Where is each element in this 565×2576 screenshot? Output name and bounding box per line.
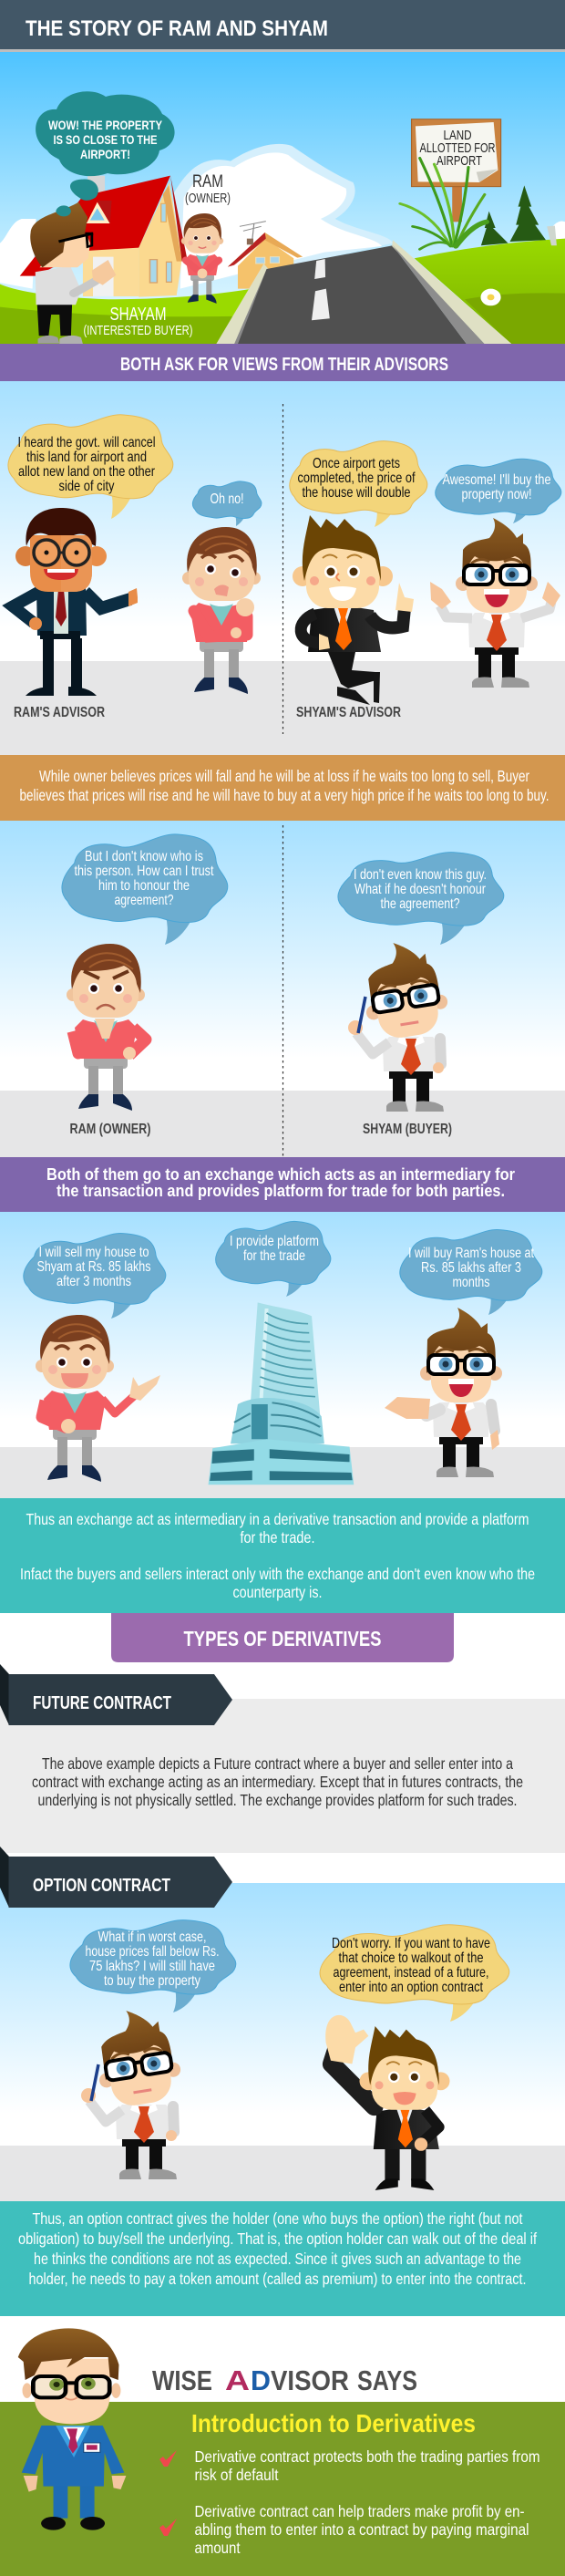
bullet 2 bbox=[195, 2502, 529, 2557]
tab: option contract: OPTION CONTRACT bbox=[33, 1875, 170, 1896]
bubble: Ram doubt: him to honour the bbox=[98, 878, 190, 894]
tab: future contract: FUTURE CONTRACT bbox=[33, 1692, 171, 1713]
bubble: Shyam buy: months bbox=[452, 1275, 490, 1290]
icon: red check 1 bbox=[159, 2450, 177, 2467]
thought text bbox=[48, 118, 163, 161]
sign text: LAND bbox=[443, 128, 472, 143]
label: Shyam's advisor: SHYAM'S ADVISOR bbox=[296, 705, 401, 720]
bubble: Ram sell: I will sell my house to bbox=[38, 1245, 149, 1260]
sign text: ALLOTTED FOR bbox=[419, 140, 496, 156]
bubble: exchange: I provide platform bbox=[230, 1234, 319, 1249]
bubble: don't worry: that choice to walkout of the bbox=[339, 1950, 484, 1966]
bubble: Ram doubt: agreement? bbox=[115, 893, 174, 908]
bubble: Ram's advisor: side of city bbox=[58, 479, 115, 494]
label: Ram's advisor: RAM'S ADVISOR bbox=[14, 705, 105, 720]
bubble: exchange bbox=[216, 1221, 331, 1297]
banner: both ask advisors bbox=[0, 344, 565, 381]
bubble: Shyam buy: I will buy Ram's house at bbox=[408, 1246, 534, 1261]
bubble: Shyam buy: Rs. 85 lakhs after 3 bbox=[421, 1260, 521, 1276]
character: Shyam with pen bbox=[81, 2003, 185, 2179]
small house bbox=[228, 222, 303, 289]
label: Ram owner: (OWNER) bbox=[185, 191, 231, 206]
bubble: Oh no: Oh no! bbox=[210, 491, 244, 507]
bullet 1 bbox=[195, 2447, 539, 2484]
banner: owner and buyer beliefs bbox=[0, 755, 565, 821]
bubble: don't worry bbox=[320, 1925, 509, 2022]
bubble: Shyam doubt: What if he doesn't honour bbox=[354, 882, 487, 897]
thought text: WOW! THE PROPERTY bbox=[48, 118, 163, 132]
banner: exchange as intermediary bbox=[0, 1498, 565, 1613]
character: Ram offering bbox=[36, 1315, 160, 1482]
label: Ram owner: RAM (OWNER) bbox=[69, 1122, 151, 1137]
icon: red check 2 bbox=[159, 2519, 177, 2536]
bubble: Shyam doubt bbox=[338, 853, 504, 945]
right hills bbox=[415, 239, 565, 344]
sign text: AIRPORT bbox=[437, 153, 482, 169]
bubble: Shyam's advisor: Once airport gets bbox=[313, 456, 400, 471]
logo heading: WISE bbox=[152, 2364, 212, 2396]
airport sign bbox=[412, 119, 501, 222]
character: Shyam with pen bbox=[348, 936, 452, 1112]
bubble: Shyam's advisor bbox=[290, 441, 427, 527]
panel: option contract scene bbox=[0, 1847, 565, 2201]
left hill bbox=[0, 284, 252, 344]
logo heading: D bbox=[251, 2364, 271, 2396]
banner: go to an exchange bbox=[0, 1157, 565, 1212]
bubble: don't worry: Don't worry. If you want to have bbox=[332, 1936, 490, 1951]
future contract text bbox=[32, 1754, 523, 1809]
logo heading bbox=[152, 2364, 417, 2396]
logo heading: VISOR bbox=[271, 2364, 349, 2396]
bubble: worst case bbox=[70, 1920, 236, 2012]
grass bbox=[400, 158, 487, 249]
bubble: Ram doubt: this person. How can I trust bbox=[75, 864, 214, 879]
character: wise advisor bbox=[18, 2328, 126, 2530]
bubble: don't worry: agreement, instead of a future, bbox=[334, 1965, 488, 1981]
big house bbox=[20, 176, 187, 297]
panel: wise advisor says bbox=[0, 2328, 565, 2576]
bubble: Shyam buy bbox=[400, 1230, 542, 1315]
panel: trust problem bbox=[0, 821, 565, 1157]
label: Shayam interested buyer: SHAYAM bbox=[109, 305, 166, 325]
thought text: IS SO CLOSE TO THE bbox=[53, 132, 157, 147]
panel: advisors' views bbox=[0, 381, 565, 755]
bubble: Shyam bbox=[436, 459, 561, 523]
label: Ram owner bbox=[185, 172, 231, 206]
banner: both ask advisors: BOTH ASK FOR VIEWS FROM THEIR ADVISORS bbox=[120, 355, 448, 375]
character: Shyam excited bbox=[430, 518, 560, 688]
bubble: Ram sell: after 3 months bbox=[56, 1274, 131, 1289]
label: Shayam interested buyer bbox=[84, 305, 193, 338]
bubble: Ram doubt bbox=[62, 834, 228, 945]
bubble: Ram's advisor bbox=[8, 415, 173, 519]
flower bbox=[480, 289, 501, 305]
bullet 2: amount bbox=[195, 2539, 241, 2557]
banner: exchange as intermediary: counterparty is. bbox=[233, 1583, 323, 1601]
sign text bbox=[419, 128, 496, 169]
logo heading: A bbox=[225, 2364, 250, 2396]
bubble: Shyam doubt: I don't even know this guy. bbox=[354, 867, 487, 883]
bubble: worst case: to buy the property bbox=[104, 1973, 200, 1989]
trees bbox=[481, 185, 557, 245]
label: Shayam interested buyer: (INTERESTED BUYER) bbox=[84, 323, 193, 338]
heading: types of derivatives bbox=[111, 1613, 454, 1662]
character: Shyam's advisor bbox=[293, 515, 414, 705]
banner: option contract explanation bbox=[0, 2201, 565, 2316]
heading: introduction to derivatives: Introduction to Derivatives bbox=[191, 2409, 476, 2437]
character: Ram's advisor bbox=[13, 508, 138, 696]
bubble: Shyam doubt: the agreement? bbox=[381, 896, 460, 912]
bubble: Oh no bbox=[192, 481, 262, 526]
label: Ram owner: RAM bbox=[192, 172, 223, 191]
panel: exchange scene bbox=[0, 1212, 565, 1498]
panel: header bbox=[0, 0, 565, 52]
bubble: exchange: for the trade bbox=[243, 1248, 305, 1264]
bubble: worst case: 75 lakhs? I will still have bbox=[89, 1959, 215, 1974]
clouds bbox=[0, 144, 565, 289]
banner: go to an exchange: the transaction and provides platform for trade for both parties. bbox=[56, 1182, 505, 1200]
road bbox=[216, 240, 511, 344]
bubble: Shyam's advisor: the house will double bbox=[303, 485, 411, 501]
building: stock exchange bbox=[209, 1302, 354, 1485]
bubble: Shyam: property now! bbox=[461, 487, 532, 502]
tab: option contract bbox=[0, 1847, 232, 1908]
title: THE STORY OF RAM AND SHYAM bbox=[26, 16, 328, 41]
panel: street scene with house, road and sign bbox=[0, 52, 565, 344]
tab: future contract bbox=[0, 1664, 232, 1725]
bubble: worst case: house prices fall below Rs. bbox=[86, 1944, 219, 1960]
character: Ram thinking bbox=[182, 527, 261, 694]
character: advisor waving bbox=[325, 2015, 450, 2190]
bubble: worst case: What if in worst case, bbox=[98, 1929, 206, 1945]
logo heading: SAYS bbox=[357, 2364, 417, 2396]
character: Ram (owner) bbox=[181, 213, 223, 304]
panel: future contract bbox=[0, 1664, 565, 1853]
bubble: Ram's advisor: I heard the govt. will cancel bbox=[18, 435, 155, 450]
cloud: thought bubble bbox=[36, 91, 175, 176]
character: Shyam gesturing bbox=[385, 1308, 502, 1477]
character: Shyam from behind bbox=[30, 180, 116, 344]
bubble: don't worry: enter into an option contract bbox=[339, 1980, 483, 1995]
bullet 1: risk of default bbox=[195, 2466, 279, 2484]
banner: go to an exchange: Both of them go to an exchange which acts as an intermediary for bbox=[46, 1165, 515, 1184]
character: Ram angry bbox=[67, 944, 146, 1111]
bubble: Ram's advisor: this land for airport and bbox=[26, 450, 147, 465]
thought text: AIRPORT! bbox=[80, 147, 130, 161]
bubble: Ram sell: Shyam at Rs. 85 lakhs bbox=[36, 1259, 151, 1275]
banner: exchange as intermediary: for the trade. bbox=[241, 1528, 315, 1547]
bubble: Ram doubt: But I don't know who is bbox=[85, 849, 203, 864]
bubble: Ram sell bbox=[24, 1234, 166, 1319]
bubble: Shyam's advisor: completed, the price of bbox=[297, 471, 416, 486]
label: Shyam buyer: SHYAM (BUYER) bbox=[363, 1122, 452, 1137]
bubble: Ram's advisor: allot new land on the other bbox=[18, 464, 156, 480]
heading: types of derivatives: TYPES OF DERIVATIVES bbox=[184, 1627, 381, 1650]
